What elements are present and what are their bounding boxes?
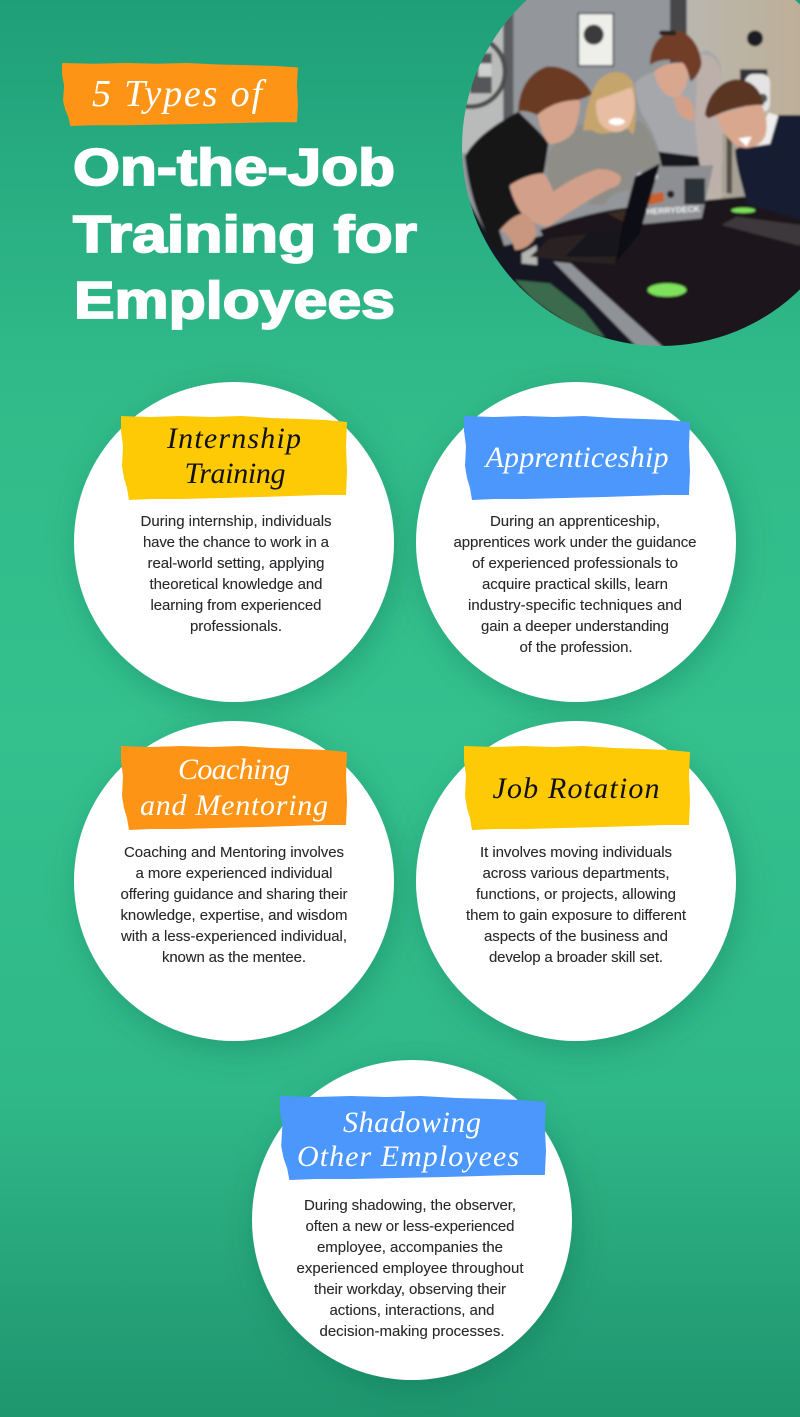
poster — [578, 13, 613, 66]
text: apprenticeship description: of the profession. — [520, 639, 632, 656]
text: shadowing description: their workday, observing their — [314, 1281, 506, 1298]
heading: shadowing other employees: Shadowing — [343, 1106, 481, 1139]
text: apprenticeship description — [454, 513, 696, 656]
man's arms — [510, 169, 621, 227]
text: coaching description: a more experienced individual — [136, 865, 332, 882]
title — [73, 139, 417, 330]
photo: four colleagues laughing around a laptop: HERRYDECK — [646, 204, 700, 216]
text: job rotation description: them to gain exposure to different — [466, 907, 687, 924]
text: job rotation description: It involves moving individuals — [480, 844, 672, 861]
tag: 5 Types of: 5 Types of — [92, 73, 266, 115]
text: job rotation description: across various departments, — [482, 865, 670, 882]
heading: shadowing other employees — [280, 1096, 546, 1180]
text: shadowing description — [296, 1197, 524, 1340]
text: coaching description: with a less-experienced individual, — [120, 928, 347, 945]
text: job rotation description: functions, or projects, allowing — [476, 886, 676, 903]
text: internship description: professionals. — [190, 618, 282, 635]
woman sitting — [547, 120, 660, 205]
text: apprenticeship description: apprentices work under the guidance — [454, 534, 696, 551]
text: coaching description: offering guidance and sharing their — [120, 886, 348, 903]
title: Training for — [73, 206, 417, 264]
text: coaching description: known as the mentee. — [162, 949, 306, 966]
text: coaching description: Coaching and Mentoring involves — [124, 844, 344, 861]
text: shadowing description: decision-making processes. — [320, 1323, 504, 1340]
heading: internship training: Internship — [166, 422, 301, 455]
text: internship description: learning from experienced — [150, 597, 322, 614]
text: internship description: real-world setting, applying — [148, 555, 324, 572]
heading: coaching and mentoring — [121, 746, 347, 830]
panel: job rotation — [416, 721, 736, 1041]
heading: internship training — [121, 416, 347, 500]
text: shadowing description: actions, interactions, and — [330, 1302, 494, 1319]
heading: job rotation: Job Rotation — [492, 772, 660, 805]
man in navy sweater — [735, 115, 800, 220]
heading: apprenticeship: Apprenticeship — [484, 441, 668, 474]
green dots — [648, 283, 686, 297]
text: apprenticeship description: During an apprenticeship, — [490, 513, 660, 530]
panel: internship training — [74, 382, 394, 702]
woman standing — [635, 50, 720, 158]
text: internship description: have the chance to work in a — [143, 534, 330, 551]
text: apprenticeship description: acquire practical skills, learn — [482, 576, 668, 593]
heading: apprenticeship — [464, 416, 690, 500]
text: apprenticeship description: of experienced professionals to — [472, 555, 678, 572]
heading: coaching and mentoring: Coaching — [178, 753, 290, 786]
silver laptop — [607, 210, 628, 222]
text: shadowing description: experienced employee throughout — [296, 1260, 524, 1277]
text: job rotation description: aspects of the business and — [484, 928, 668, 945]
text: coaching description — [120, 844, 348, 966]
photo: four colleagues laughing around a laptop: GIO — [636, 168, 659, 185]
text: internship description: During internship, individuals — [140, 513, 332, 530]
text: apprenticeship description: gain a deeper understanding — [481, 618, 669, 635]
text: internship description — [140, 513, 332, 635]
text: apprenticeship description: industry-specific techniques and — [468, 597, 682, 614]
heading: internship training: Training — [184, 457, 286, 490]
text: job rotation description: develop a broader skill set. — [489, 949, 663, 966]
table — [539, 196, 800, 346]
text: coaching description: knowledge, expertise, and wisdom — [120, 907, 348, 924]
dark floor area — [470, 200, 636, 344]
text: job rotation description — [466, 844, 687, 966]
right laptop — [722, 217, 800, 247]
panel: coaching and mentoring — [74, 721, 394, 1041]
text: internship description: theoretical knowledge and — [150, 576, 322, 593]
panel: shadowing other employees — [252, 1060, 572, 1380]
text: shadowing description: employee, accompanies the — [317, 1239, 503, 1256]
heading: job rotation — [464, 746, 690, 830]
front laptop — [530, 230, 622, 264]
title: Employees — [74, 272, 395, 330]
title: On-the-Job — [73, 139, 395, 197]
panel: apprenticeship — [416, 382, 736, 702]
tag: 5 Types of — [62, 63, 298, 126]
man in black t-shirt — [465, 112, 548, 248]
text: shadowing description: often a new or less-experienced — [306, 1218, 514, 1235]
photo: four colleagues laughing around a laptop — [462, 0, 800, 346]
heading: shadowing other employees: Other Employees — [297, 1140, 519, 1173]
text: shadowing description: During shadowing, the observer, — [304, 1197, 516, 1214]
heading: coaching and mentoring: and Mentoring — [140, 789, 328, 822]
